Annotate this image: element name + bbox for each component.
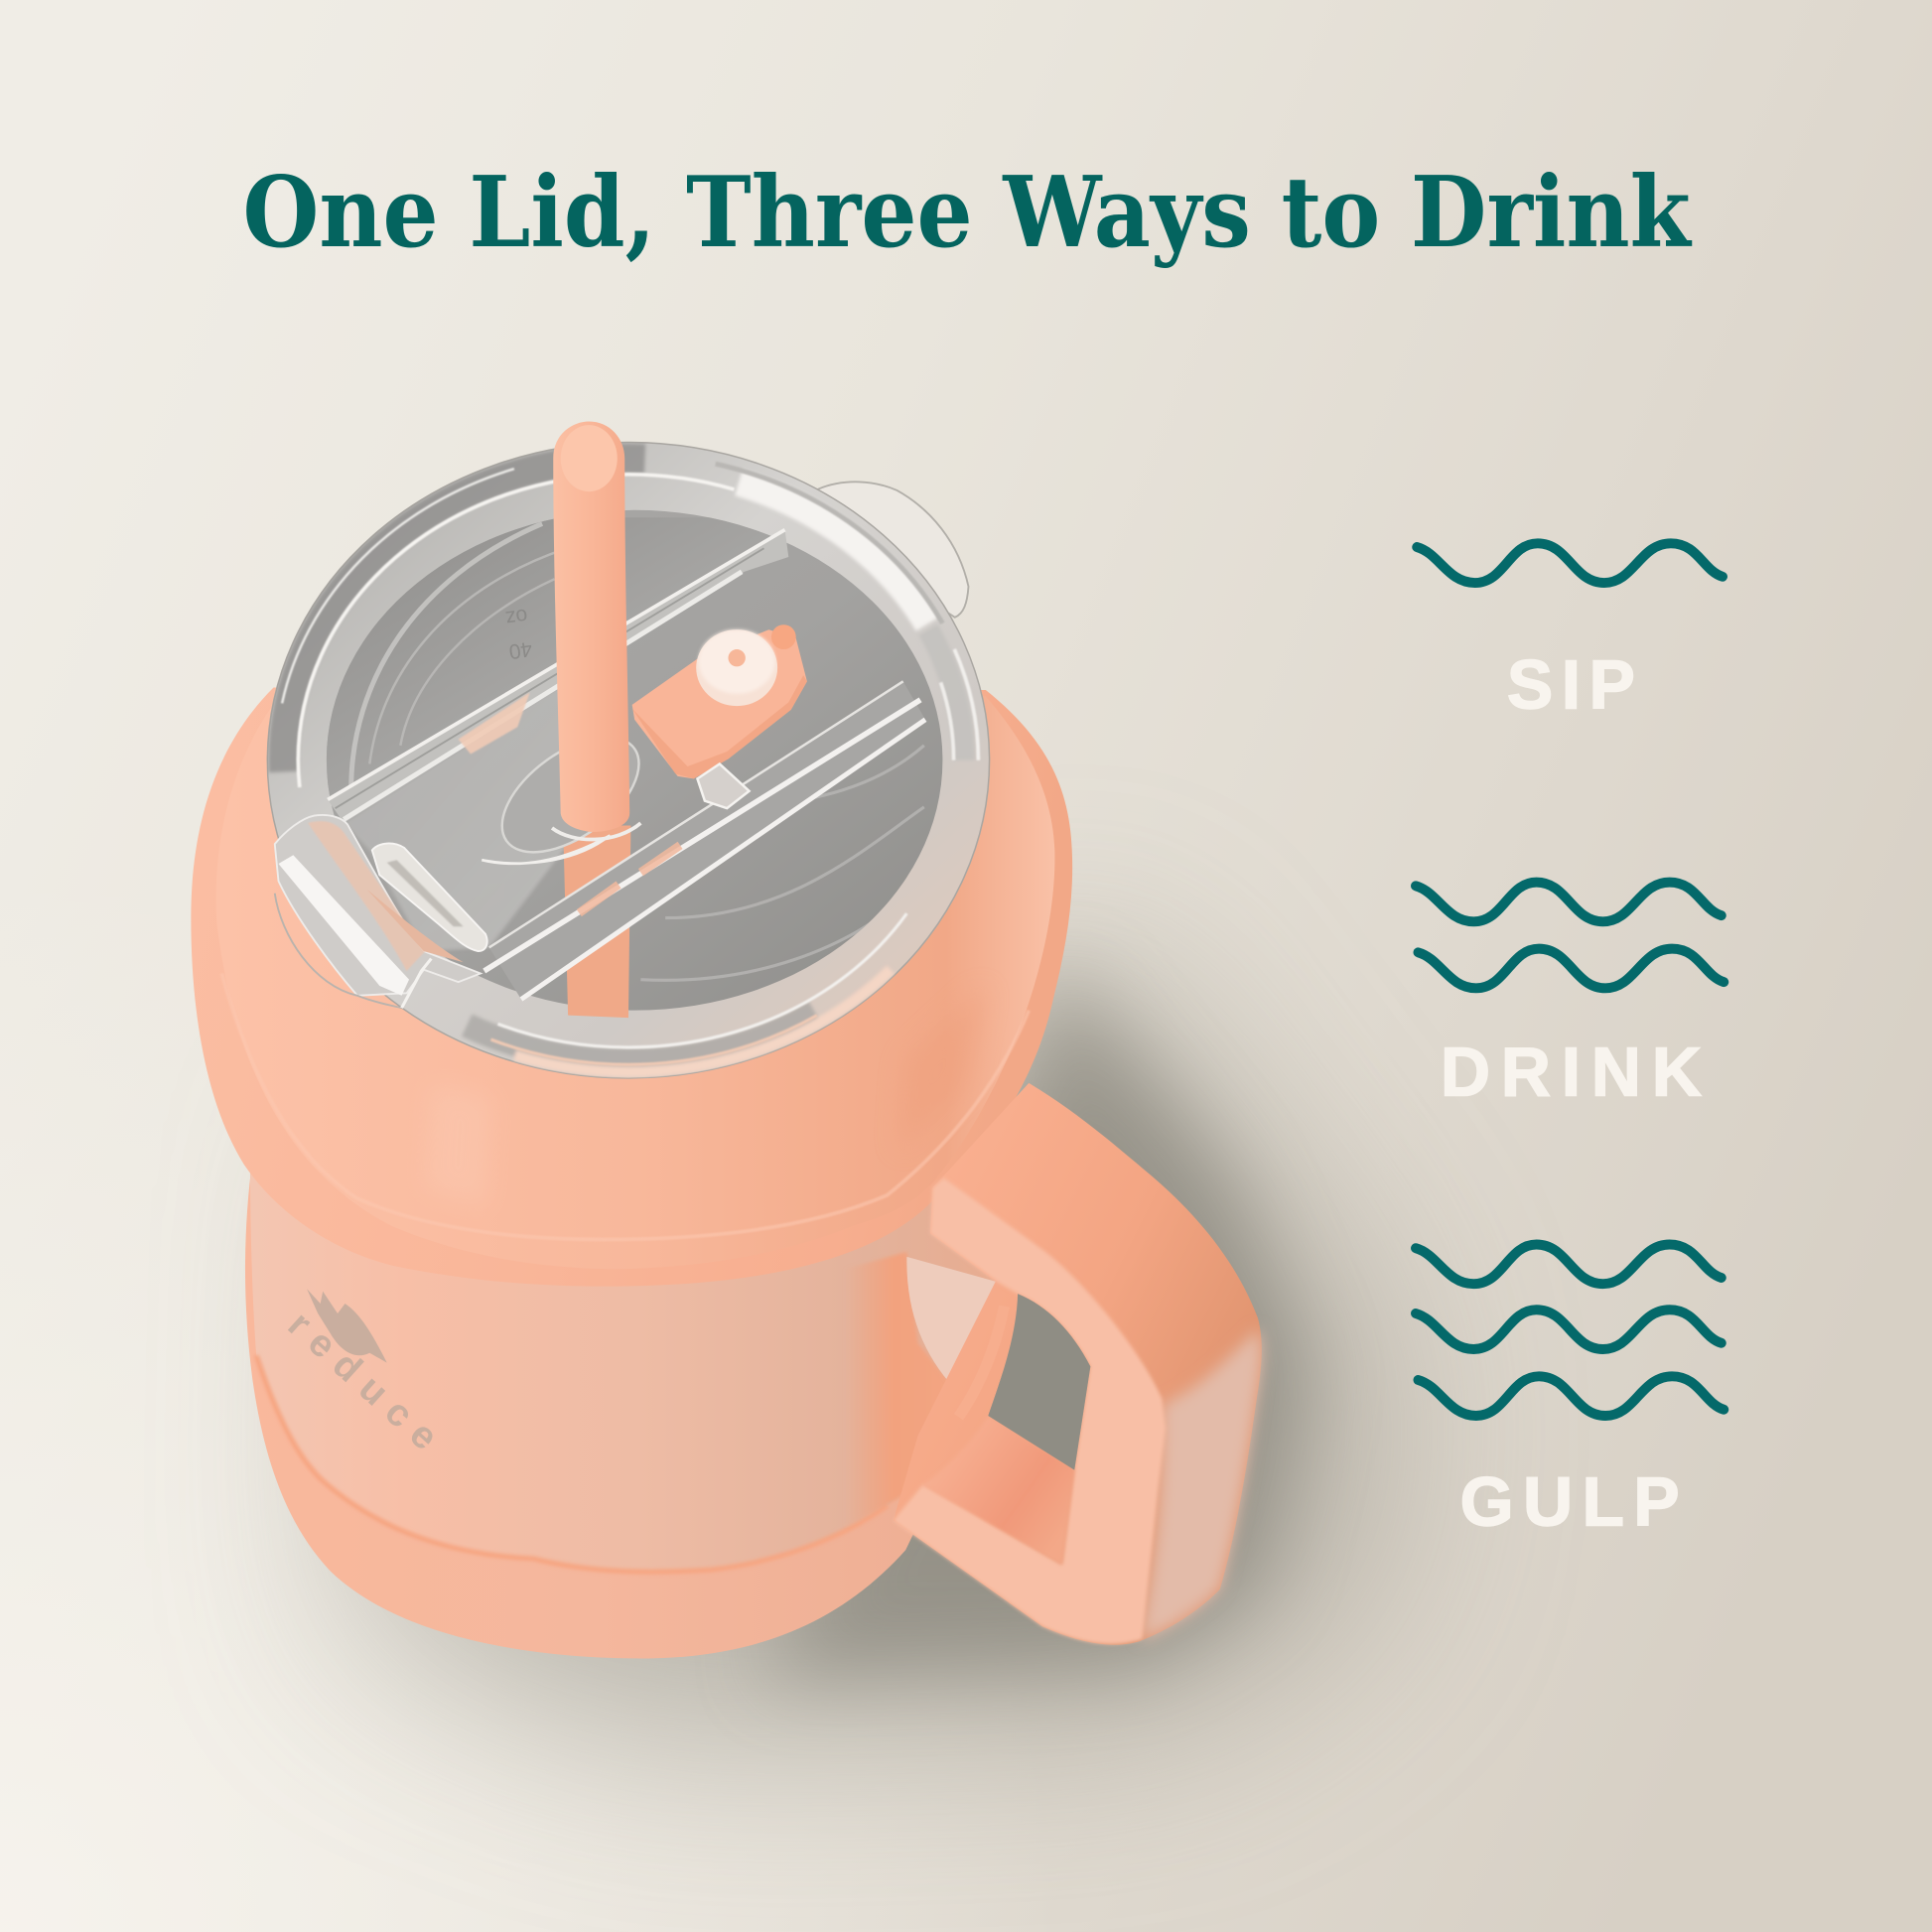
front latch block <box>275 815 481 1008</box>
stopper plug <box>696 629 777 706</box>
straw <box>553 421 629 832</box>
reflection of straw <box>563 826 630 1018</box>
pill window <box>372 843 487 951</box>
straw seat oval <box>483 715 659 875</box>
handle front lip <box>894 1177 1166 1644</box>
body side seen through handle <box>844 1252 996 1528</box>
lid right ear <box>818 482 968 618</box>
mug cast shadow <box>357 936 1380 1737</box>
handle far right face <box>1140 1328 1262 1641</box>
sip group <box>1417 543 1723 724</box>
handle lower arm <box>923 1416 1074 1565</box>
lid outer rim <box>267 443 990 1078</box>
handle outer silhouette <box>894 1083 1262 1645</box>
measurement marks <box>502 604 534 663</box>
sip label: SIP <box>1507 646 1635 724</box>
drink label: DRINK <box>1441 1033 1702 1110</box>
mug shoulder band <box>191 688 1072 1287</box>
upper slider bar <box>328 530 788 823</box>
handle opening <box>988 1294 1090 1470</box>
gulp label: GULP <box>1460 1462 1680 1540</box>
rim reflections <box>276 452 981 1072</box>
lid inner well <box>327 510 942 1011</box>
upper segment <box>321 517 788 799</box>
middle wedge <box>344 685 573 951</box>
mug illustration <box>191 421 1262 1658</box>
measurement marks: 40 <box>507 637 534 663</box>
sip wave icon <box>1417 543 1723 583</box>
drink group <box>1416 883 1724 1110</box>
straw opening <box>561 425 618 491</box>
reduce logo: reduce <box>280 1304 446 1458</box>
stopper tab <box>632 624 807 778</box>
transparent lid <box>267 421 990 1078</box>
gulp group <box>1416 1244 1724 1540</box>
drink wave icon <box>1416 883 1724 988</box>
lower slider channel <box>489 681 925 1000</box>
hinge block <box>697 763 750 808</box>
handle <box>894 1083 1262 1645</box>
shoulder upper dome <box>216 696 1054 1269</box>
title: One Lid, Three Ways to Drink <box>242 156 1693 270</box>
mug body <box>250 1109 1023 1572</box>
mug base ring <box>245 1109 1023 1658</box>
lower arcs <box>640 746 924 980</box>
measurement marks: oz <box>504 604 529 629</box>
gulp wave icon <box>1416 1244 1724 1416</box>
